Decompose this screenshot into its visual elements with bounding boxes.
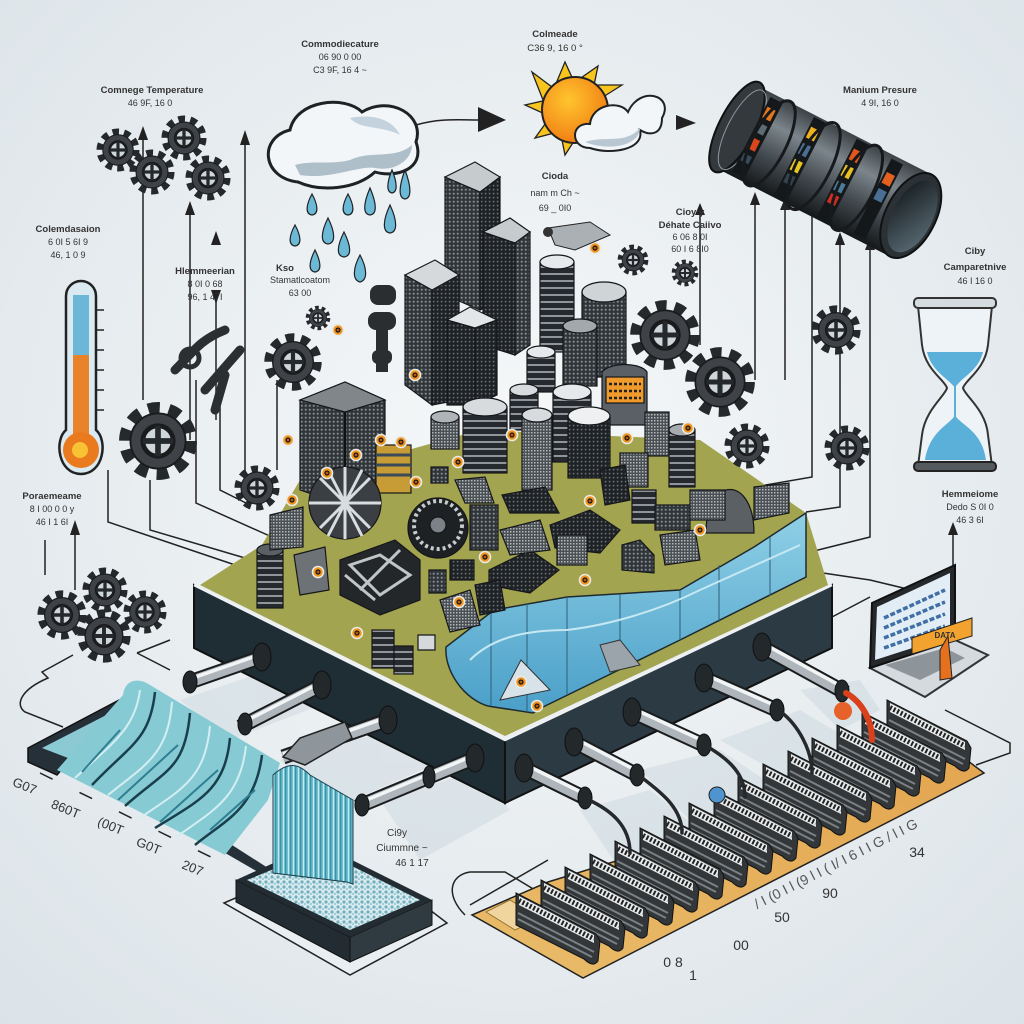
label: city: 60 I 6 8I0 [671,244,709,254]
label: right lower [942,489,998,525]
label: slanted right: 0 8 [663,954,683,970]
arrowheads [70,107,958,535]
platform base [194,430,832,803]
label: pressure [843,85,917,108]
label: hlemmeerian: 96, 1 47I [187,292,223,302]
label: key: Kso [276,263,294,274]
label: city [659,207,722,254]
label: hlemmeerian: Hlemmeerian [175,266,235,277]
label: cloud: Cioda [542,171,569,182]
icon: thermometer [59,281,104,474]
water sheet [57,681,280,855]
mesh block [340,540,420,615]
icon: laptop [870,565,988,697]
label: top centre [301,39,379,75]
connector lines [20,120,1010,915]
city skyline [257,162,789,712]
icon: laptop: DATA [934,631,956,640]
lens section 3 [817,139,869,223]
label: slanted right: / I (0 I l (9 l I ( I/ I 6 I I G / l I G [751,815,920,912]
land [200,430,828,736]
label: slanted left: (00T [95,814,126,838]
label: bottom centre: Ciummne ~ [376,843,428,854]
orange block [602,364,647,425]
left block [300,382,385,505]
label: hlemmeerian: 8 0I 0 68 [187,279,223,289]
label: hlemmeerian [175,266,235,302]
falling water [273,766,353,884]
radiator units [516,700,971,964]
icon: gravel basin [224,843,447,975]
valve body [283,722,352,765]
label: slanted left: G07 [10,774,39,797]
striped tower [376,445,411,493]
icon: gears bottom left [42,571,163,658]
label: right: Ciby [965,246,986,257]
label: cloud: nam m Ch ~ [530,188,580,198]
label: left middle: 46, 1 0 9 [50,250,86,260]
label: right [944,246,1006,286]
label: top left: Comnege Temperature [101,85,203,96]
icon: gears top left [100,119,227,197]
tower 3 [405,260,459,405]
label: left lower: 46 I 1 6I [36,517,68,527]
ground shadows [180,660,880,870]
round mechanism [408,498,468,558]
water [446,513,806,713]
label: cloud [530,171,580,213]
label: right: Camparetnive [944,262,1006,273]
label: top centre: Commodiecature [301,39,379,50]
label: bottom centre [376,828,429,869]
label: slanted right [663,815,925,983]
label: slanted right: 90 [822,885,838,901]
lens section 4 [853,159,903,239]
label: right lower: 46 3 6I [956,515,984,525]
label: bottom centre: 46 1 17 [395,858,429,869]
icon: cloud probe [543,222,610,250]
label: right lower: Hemmeiome [942,489,998,500]
label: top centre: 06 90 0 00 [319,52,361,62]
label: left middle: Colemdasaion [36,224,101,235]
waterfall tray [28,681,280,872]
label: slanted right: 50 [774,909,790,925]
label: left lower: Poraemeame [22,491,82,502]
label: slanted left [10,774,206,879]
label: left middle [36,224,101,260]
label: weather [527,29,583,54]
label: pressure: 4 9I, 16 0 [861,98,899,108]
label: slanted right: 1 [689,967,697,983]
label: key: 63 00 [289,288,311,298]
label: right: 46 I 16 0 [957,276,993,286]
raindrops [290,170,410,282]
label: left lower [22,491,82,527]
label: top left [101,85,203,108]
label: top left: 46 9F, 16 0 [128,98,172,108]
tower 1 [445,162,500,310]
label: slanted left: G0T [134,834,163,858]
label: city: 6 06 8 0I [672,232,708,242]
floating gears [126,247,866,507]
icon: wrench cluster [175,330,240,410]
label: key: Stamatlcoatom [270,275,330,285]
tall cylinders [527,255,626,392]
label: slanted left: 207 [180,857,206,879]
lens section 1 [732,97,783,178]
low city blocks [257,242,789,712]
icon: valve column [368,285,396,372]
icon: rain cloud [268,102,418,282]
icon: camera lens barrel [698,74,956,271]
label: key [270,263,330,298]
label: left lower: 8 I 00 0 0 y [30,504,75,514]
label: slanted left: 860T [49,796,82,821]
icon: sun and cloud [525,62,665,155]
label: weather: Colmeade [532,29,578,40]
label: right lower: Dedo S 0I 0 [946,502,994,512]
hoses [589,693,872,853]
label: top centre: C3 9F, 16 4 ~ [313,65,367,75]
label: weather: C36 9, 16 0 ° [527,43,583,54]
label: left middle: 6 0I 5 6I 9 [48,237,88,247]
label: pressure: Manium Presure [843,85,917,96]
label: bottom centre: Ci9y [387,828,407,839]
pipes [183,633,849,816]
label: slanted right: 34 [909,844,925,860]
tower 2 [483,218,530,355]
label: city: Déhate Caiivo [659,220,722,231]
tower 4 [447,307,497,405]
radial star building [309,467,381,539]
label: slanted right: 00 [733,937,749,953]
label: cloud: 69 _ 0I0 [539,203,571,213]
lens section 2 [774,117,826,202]
icon: hourglass [914,298,996,471]
middle cylinders [431,384,695,490]
radiator mat [472,693,984,978]
label: city: Cioy y [676,207,705,218]
